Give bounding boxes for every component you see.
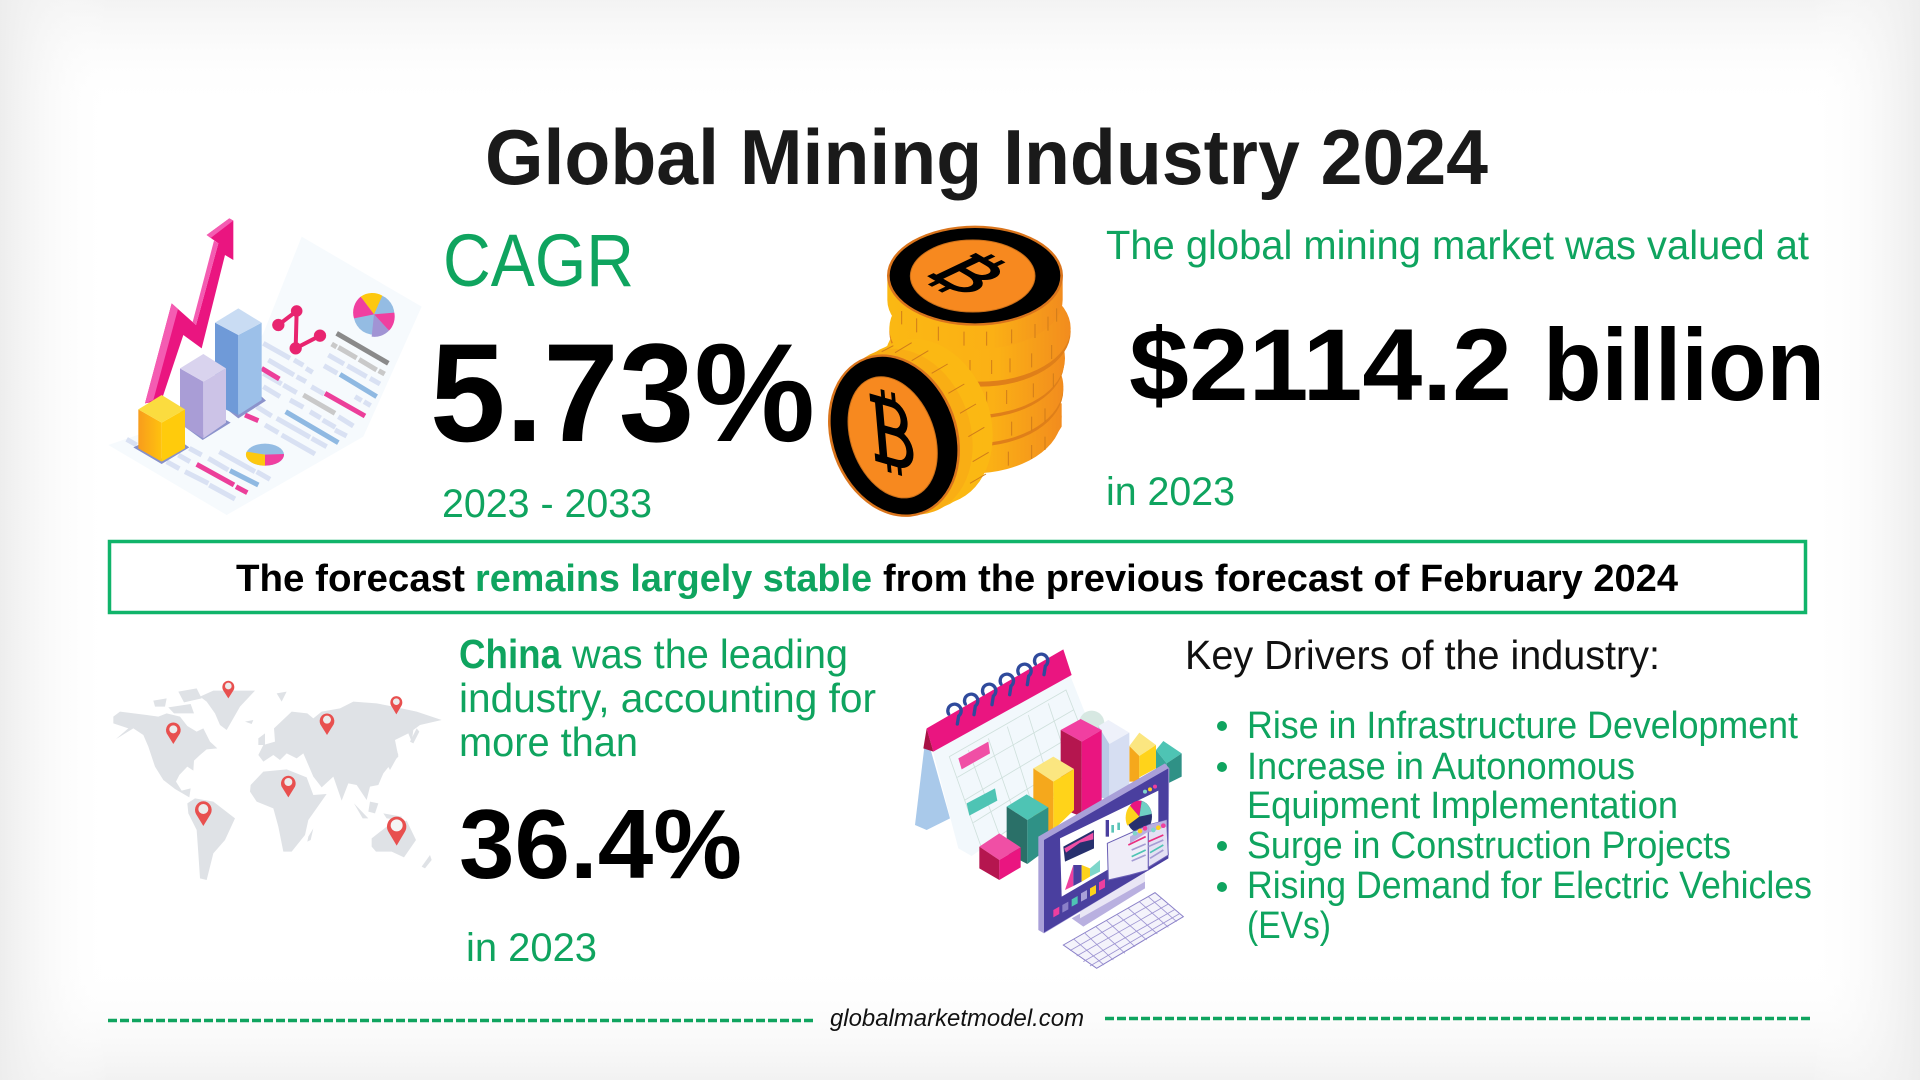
pale circle [1079,711,1104,736]
screen pie chart [1127,801,1152,833]
China share value: 36.4% [459,789,742,899]
banner text start: The forecast [236,558,465,600]
tall yellow bar [1033,757,1074,840]
small yellow bar [1129,733,1156,782]
China share year: in 2023 [466,926,597,970]
paper sheet [108,237,422,515]
monitor [1038,763,1169,933]
icon: calendar, bars and monitor [915,649,1183,968]
tall pink bar [1061,719,1102,817]
China text [459,631,876,765]
continents [113,688,442,880]
coin edge ticks [902,308,1057,466]
icon: report with growth arrow and bars [108,218,422,515]
CAGR label: CAGR [443,219,634,302]
market value unit: billion [1543,308,1825,422]
monitor stand [1072,870,1145,927]
calendar grid [949,690,1097,848]
table rows [127,343,380,499]
line three: more than [459,719,638,765]
market value amount: $2114.2 [1129,308,1512,422]
screen small bars [1102,820,1112,837]
bullet two: Equipment Implementation [1247,785,1678,827]
calendar rings [948,654,1048,724]
bullet four [1217,865,1812,947]
yellow bar [133,395,189,464]
bullet four: Rising Demand for Electric Vehicles [1247,865,1812,907]
market value intro: The global mining market was valued at [1106,222,1810,268]
pie chart upper [353,293,395,337]
keyboard [1063,893,1183,968]
line one rest: was the leading [571,631,848,677]
line graph glyph [272,305,326,354]
pale bar [1098,720,1129,800]
header dots [1133,785,1166,836]
growth arrow [145,218,233,403]
teal bar [1007,794,1048,864]
footer url: globalmarketmodel.com [830,1005,1084,1032]
bullet one: Rise in Infrastructure Development [1247,705,1798,747]
banner text end: from the previous forecast of February 2024 [883,558,1678,600]
front coin [806,320,1015,536]
key drivers heading: Key Drivers of the industry: [1185,632,1660,678]
stacked coins [883,275,1071,473]
front coin edge ticks [882,343,989,483]
pink cube [979,833,1021,880]
icon: world map with pins [113,681,442,880]
icon: bitcoin mark on top coin [920,249,1016,298]
bullet two [1217,746,1678,827]
CAGR value: 5.73% [430,314,815,471]
icon: bitcoin mark on front coin [869,386,912,479]
bullet four: (EVs) [1247,905,1331,947]
top coin face [887,226,1063,326]
key drivers list [1217,705,1812,947]
banner text highlight: remains largely stable [475,558,872,600]
forecast banner [110,542,1806,612]
bullet two: Increase in Autonomous [1247,746,1635,788]
line two: industry, accounting for [459,675,876,721]
pie chart lower [246,444,284,466]
purple bar [180,354,231,440]
screen panels [1107,825,1148,880]
calendar back [915,733,950,830]
market value [1129,308,1825,422]
China word: China [459,631,562,677]
panel lines [1128,835,1163,845]
calendar events [958,742,990,769]
screen area chart [1063,830,1094,862]
calendar page [932,675,1105,856]
map pins [166,681,406,846]
icon: bitcoin coin stack [806,226,1071,536]
screen colour tabs [1053,907,1059,917]
calendar header [927,649,1072,752]
CAGR period: 2023 - 2033 [442,482,652,526]
title: Global Mining Industry 2024 [485,113,1488,201]
coloured rows [197,333,388,493]
bullet three: Surge in Construction Projects [1247,825,1731,867]
market value year: in 2023 [1106,470,1235,514]
far teal bar [1156,741,1182,787]
blue bar [215,308,266,418]
